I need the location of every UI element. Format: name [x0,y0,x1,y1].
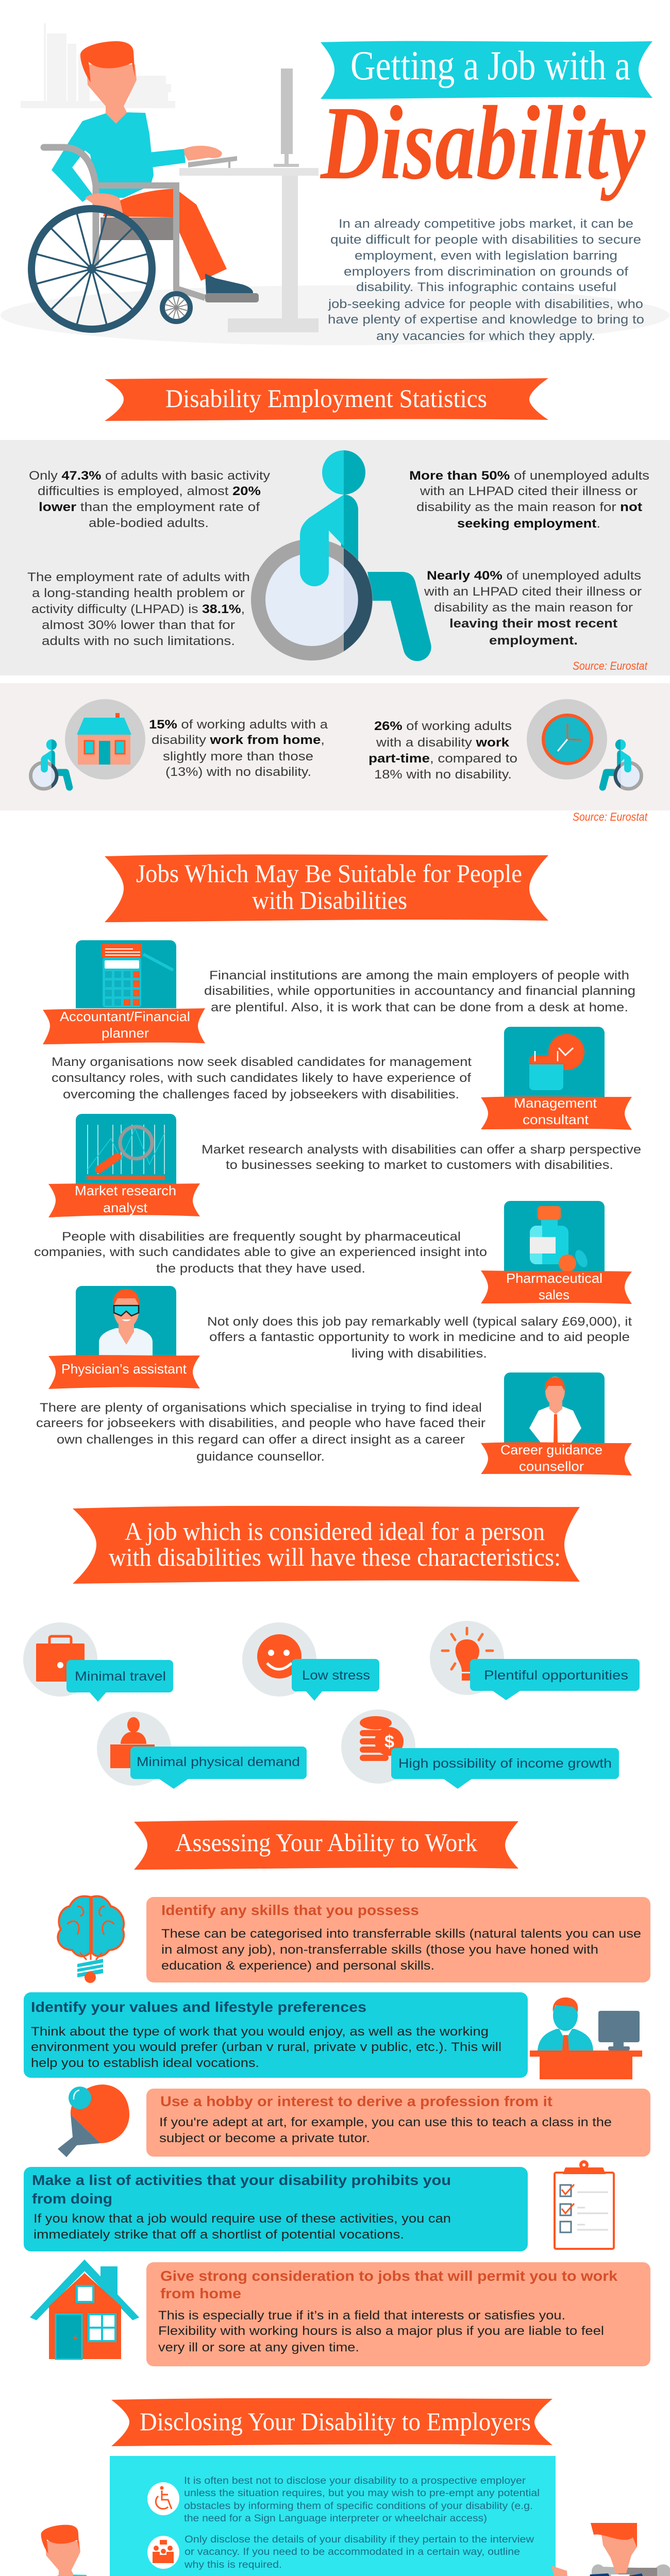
heading: ideal job characteristics: A job which is considered ideal for a person [125,1517,545,1546]
panel: values and lifestyle [24,1992,528,2078]
icon: house in circle [65,699,145,779]
stat: nearly 40%: with an LHPAD cited their illness or [424,585,642,599]
job: physician's assistant: Physician’s assistant [61,1361,187,1377]
heading: Disclosing Your Disability to Employers: Disclosing Your Disability to Employers [140,2407,531,2436]
heading: ideal job characteristics: with disabilities will have these characteristics: [109,1543,561,1571]
advice: best not to disclose: unless the situation requires, but you may wish to pre-empt any potential [184,2488,540,2499]
panel: work patterns [0,683,670,810]
stat: more than 50%: seeking employment . [457,517,600,531]
floor ellipse [1,285,669,345]
text: accountant description [204,969,635,1014]
panel: identify skills: These can be categorised into transferrable skills (natural talents you can use [161,1927,641,1941]
icon: large wheelchair user [258,450,431,661]
icon: calculator [76,940,176,1008]
stat: 15% work from home: 15% of working adults with a [149,718,328,732]
panel: values and lifestyle: environment you would prefer (urban v rural, private v public, etc.). This will [31,2040,501,2054]
heading: Jobs Which May Be Suitable: Jobs Which May Be Suitable for People [136,859,522,888]
job: accountant: Accountant/Financial [60,1009,190,1024]
icon: shelf with books [21,23,175,108]
illustration: wheelchair user at interview [7,2525,166,2576]
stat: more than 50%: with an LHPAD cited their illness or [420,484,638,498]
stat: nearly 40%: Nearly 40% of unemployed adults [427,569,641,583]
panel: list of activities: immediately strike that off a shortlist of potential vocations. [34,2228,404,2242]
text: physician description [207,1315,632,1361]
stat: 26% part-time: with a disability work [376,736,510,750]
job: pharmaceutical sales [481,1201,632,1304]
job: market research analyst: Market research [75,1183,176,1198]
job: career guidance counsellor [481,1372,632,1476]
source: Source: Eurostat [573,659,648,672]
icon: brain bulb [58,1896,124,1983]
text: accountant description: are plentiful. Also, it is work that can be done from a desk at home. [211,1001,628,1014]
characteristic: minimal travel [23,1622,173,1702]
advice: best not to disclose: It is often best not to disclose your disability to a prospective employer [184,2476,526,2486]
stat: nearly 40% [424,569,642,648]
text: physician description: offers a fantastic opportunity to work in medicine and to aid people [209,1330,630,1344]
stat: 47.3% employed: able-bodied adults. [89,516,209,530]
intro text: any vacancies for which they apply. [376,329,595,343]
stat: more than 50% [409,469,649,531]
heading: Assessing Your Ability to Work: Assessing Your Ability to Work [175,1828,477,1857]
intro text: In an already competitive jobs market, it can be [339,217,633,231]
panel: work from home: from home [160,2285,241,2301]
icon: coins [360,1716,404,1761]
icon: small wheelchair user mirrored [599,739,642,791]
text: career guidance description: own challenges in this regard can offer a direct insight as a career [57,1433,465,1447]
icon: suitcase [36,1636,85,1682]
icon: desk and monitor [179,69,319,332]
stat: 47.3% employed [29,469,270,530]
text: consultant description: overcoming the challenges faced by jobseekers with disabilities. [63,1088,459,1101]
stat: 38.1% LHPAD: almost 30% lower than that for [42,618,235,632]
text: accountant description: Financial institutions are among the main employers of people with [209,969,629,982]
text: pharmaceutical description: People with disabilities are frequently sought by pharmaceutical [62,1230,461,1244]
icon: medicine bottle [504,1201,605,1272]
heading: Disability Employment Statistics: Disability Employment Statistics [165,384,487,413]
panel: identify skills: Identify any skills that you possess [161,1902,419,1918]
panel: values and lifestyle: Think about the type of work that you would enjoy, as well as the working [31,2025,489,2039]
stat: 15% work from home [149,718,328,779]
panel: work from home: Give strong consideration to jobs that will permit you to work [160,2268,617,2284]
panel: list of activities [24,2167,528,2251]
advice: only relevant details: Only disclose the details of your disability if they pertain to the interview [185,2534,534,2545]
job: accountant: planner [102,1025,149,1041]
intro text [328,217,644,343]
icon: smiley [257,1634,301,1679]
job: career guidance counsellor: Career guidance [500,1442,602,1458]
characteristic: low stress [242,1622,379,1701]
advice: only relevant details: why this is required. [184,2560,282,2570]
icon: small wheelchair user [30,739,73,791]
text: career guidance description: There are plenty of organisations which specialise in trying to find ideal [40,1401,482,1415]
panel: disclosure advice [110,2456,556,2576]
panel: identify skills [146,1897,650,1982]
text: pharmaceutical description [34,1230,487,1276]
intro text: have plenty of expertise and knowledge to bring to [328,313,644,327]
icon: table tennis paddle [58,2084,129,2157]
stat: 47.3% employed: lower than the employment rate of [39,500,260,514]
icon: chart with magnifier [76,1114,176,1185]
stat: nearly 40%: leaving their most recent [449,617,617,631]
stat: 38.1% LHPAD: a long-standing health problem or [32,586,245,600]
icon: doctor [76,1286,176,1357]
panel: values and lifestyle: help you to establish ideal vocations. [31,2056,259,2070]
advice: only relevant details [147,2534,534,2570]
job: career guidance counsellor: counsellor [519,1459,584,1474]
stat: 38.1% LHPAD [27,570,250,648]
advice: best not to disclose: the need for a Sign Language interpreter or wheelchair access) [184,2513,487,2524]
stat: more than 50%: disability as the main reason for not [416,500,642,514]
stat: 47.3% employed: Only 47.3% of adults with basic activity [29,469,270,483]
intro text: employment, even with legislation barring [355,249,617,263]
advice: best not to disclose: obstacles by informing them of specific conditions of your disability (e.g. [184,2501,533,2512]
icon: coins: $ [384,1732,394,1752]
icon: clock and calendar [504,1027,605,1097]
stat: 47.3% employed: difficulties is employed, almost 20% [38,484,261,498]
text: market research description: Market research analysts with disabilities can offer a sharp perspective [202,1143,641,1157]
heading: Assessing Your Ability to Work [134,1820,518,1870]
icon: clock in circle [527,699,607,779]
illustration: interviewer behind desk [541,2523,670,2576]
job: market research analyst [48,1114,200,1217]
job: physician's assistant [48,1286,200,1389]
panel: hobby or interest [146,2089,650,2157]
stat: nearly 40%: disability as the main reason for [434,601,633,615]
characteristic: minimal travel: Minimal travel [75,1669,166,1684]
stat: more than 50%: More than 50% of unemployed adults [409,469,649,483]
icon: counsellor [504,1372,605,1444]
text: physician description: living with disabilities. [351,1347,487,1361]
stat: 38.1% LHPAD: adults with no such limitations. [42,634,235,648]
heading: Disclosing Your Disability to Employers [111,2398,552,2446]
stat: 15% work from home: slightly more than those [163,750,313,764]
text: market research description [202,1143,641,1172]
icon: clipboard checklist [555,2160,614,2249]
panel: work from home: very ill or sore at any given time. [158,2341,359,2354]
characteristic: plentiful opportunities: Plentiful opportunities [484,1668,628,1683]
panel: hobby or interest: If you're adept at art, for example, you can use this to teach a class in the [159,2115,612,2129]
intro text: disability. This infographic contains useful [356,280,616,294]
job: management consultant: Management [514,1095,597,1111]
advice: only relevant details: or vacancy. If you need to be accommodated in a certain way, outline [185,2547,520,2557]
text: career guidance description: guidance counsellor. [196,1450,325,1464]
intro text: job-seeking advice for people with disabilities, who [328,297,643,311]
stat: 26% part-time: 18% with no disability. [374,768,512,782]
text: career guidance description [36,1401,485,1464]
heading: Jobs Which May Be Suitable [105,854,548,922]
characteristic: high possibility of income growth: High possibility of income growth [398,1756,612,1771]
panel: work from home [146,2262,650,2366]
characteristic: minimal physical demand: Minimal physical demand [137,1755,300,1769]
characteristic: high possibility of income growth [341,1709,619,1789]
text: physician description: Not only does this job pay remarkably well (typical salary £69,000), it [207,1315,632,1329]
job: accountant [43,940,205,1044]
stat: 15% work from home: disability work from home , [152,733,325,747]
stat: 26% part-time [368,719,517,782]
source: Source: Eurostat [573,810,648,823]
heading: Jobs Which May Be Suitable: with Disabilities [252,886,407,914]
panel: identify skills: in almost any job), non-transferrable skills (those you have honed with [161,1943,598,1957]
panel: identify skills: education & experience) and personal skills. [161,1959,434,1973]
panel: values and lifestyle: Identify your values and lifestyle preferences [31,1999,366,2015]
stat: 26% part-time: part-time , compared to [368,752,517,766]
text: pharmaceutical description: companies, with such candidates able to give an experienced insight into [34,1245,487,1259]
stat: 26% part-time: 26% of working adults [374,719,512,733]
text: consultant description [52,1055,472,1101]
panel: statistics [0,440,670,675]
stat: 38.1% LHPAD: The employment rate of adults with [27,570,250,584]
intro text: quite difficult for people with disabilities to secure [330,233,641,247]
panel: hobby or interest: subject or become a private tutor. [159,2131,370,2145]
characteristic: low stress: Low stress [302,1668,370,1683]
icon: light bulb [442,1628,493,1681]
job: pharmaceutical sales: sales [539,1287,569,1302]
text: career guidance description: careers for jobseekers with disabilities, and people who have faced their [36,1416,485,1430]
characteristic: plentiful opportunities [430,1621,640,1700]
text: consultant description: Many organisations now seek disabled candidates for management [52,1055,472,1069]
panel: work from home: Flexibility with working hours is also a major plus if you are liable to feel [158,2324,604,2338]
text: accountant description: disabilities, while opportunities in accountancy and financial planning [204,984,635,998]
panel: work from home: This is especially true if it’s in a field that interests or satisfies you. [158,2309,565,2323]
panel: list of activities: from doing [32,2191,112,2207]
panel: list of activities: Make a list of activities that your disability prohibits you [32,2172,451,2188]
icon: person at desk [110,1717,155,1768]
stat: nearly 40%: employment. [489,634,578,648]
advice: best not to disclose [147,2476,540,2524]
text: pharmaceutical description: the products that they have used. [156,1262,365,1276]
icon: house [32,2262,137,2359]
stat: 15% work from home: (13%) with no disability. [165,765,311,779]
text: consultant description: consultancy roles, with such candidates likely to have experience of [52,1071,471,1085]
illustration: person in wheelchair at desk [31,41,259,329]
heading: Disability Employment Statistics [105,378,548,421]
intro text: employers from discrimination on grounds of [344,265,628,279]
stat: 38.1% LHPAD: activity difficulty (LHPAD) is 38.1% , [31,602,245,616]
characteristic: minimal physical demand [97,1711,307,1789]
panel: hobby or interest: Use a hobby or interest to derive a profession from it [160,2093,552,2109]
job: pharmaceutical sales: Pharmaceutical [506,1270,602,1286]
panel: list of activities: If you know that a job would require use of these activities, you can [34,2212,451,2226]
job: management consultant [481,1027,632,1130]
text: market research description: to businesses seeking to market to customers with disabilities. [226,1158,613,1172]
heading: ideal job characteristics [73,1506,580,1584]
title banner [321,41,652,99]
job: management consultant: consultant [523,1112,589,1127]
icon: person at desk with monitor [530,1997,642,2079]
job: market research analyst: analyst [103,1200,148,1215]
